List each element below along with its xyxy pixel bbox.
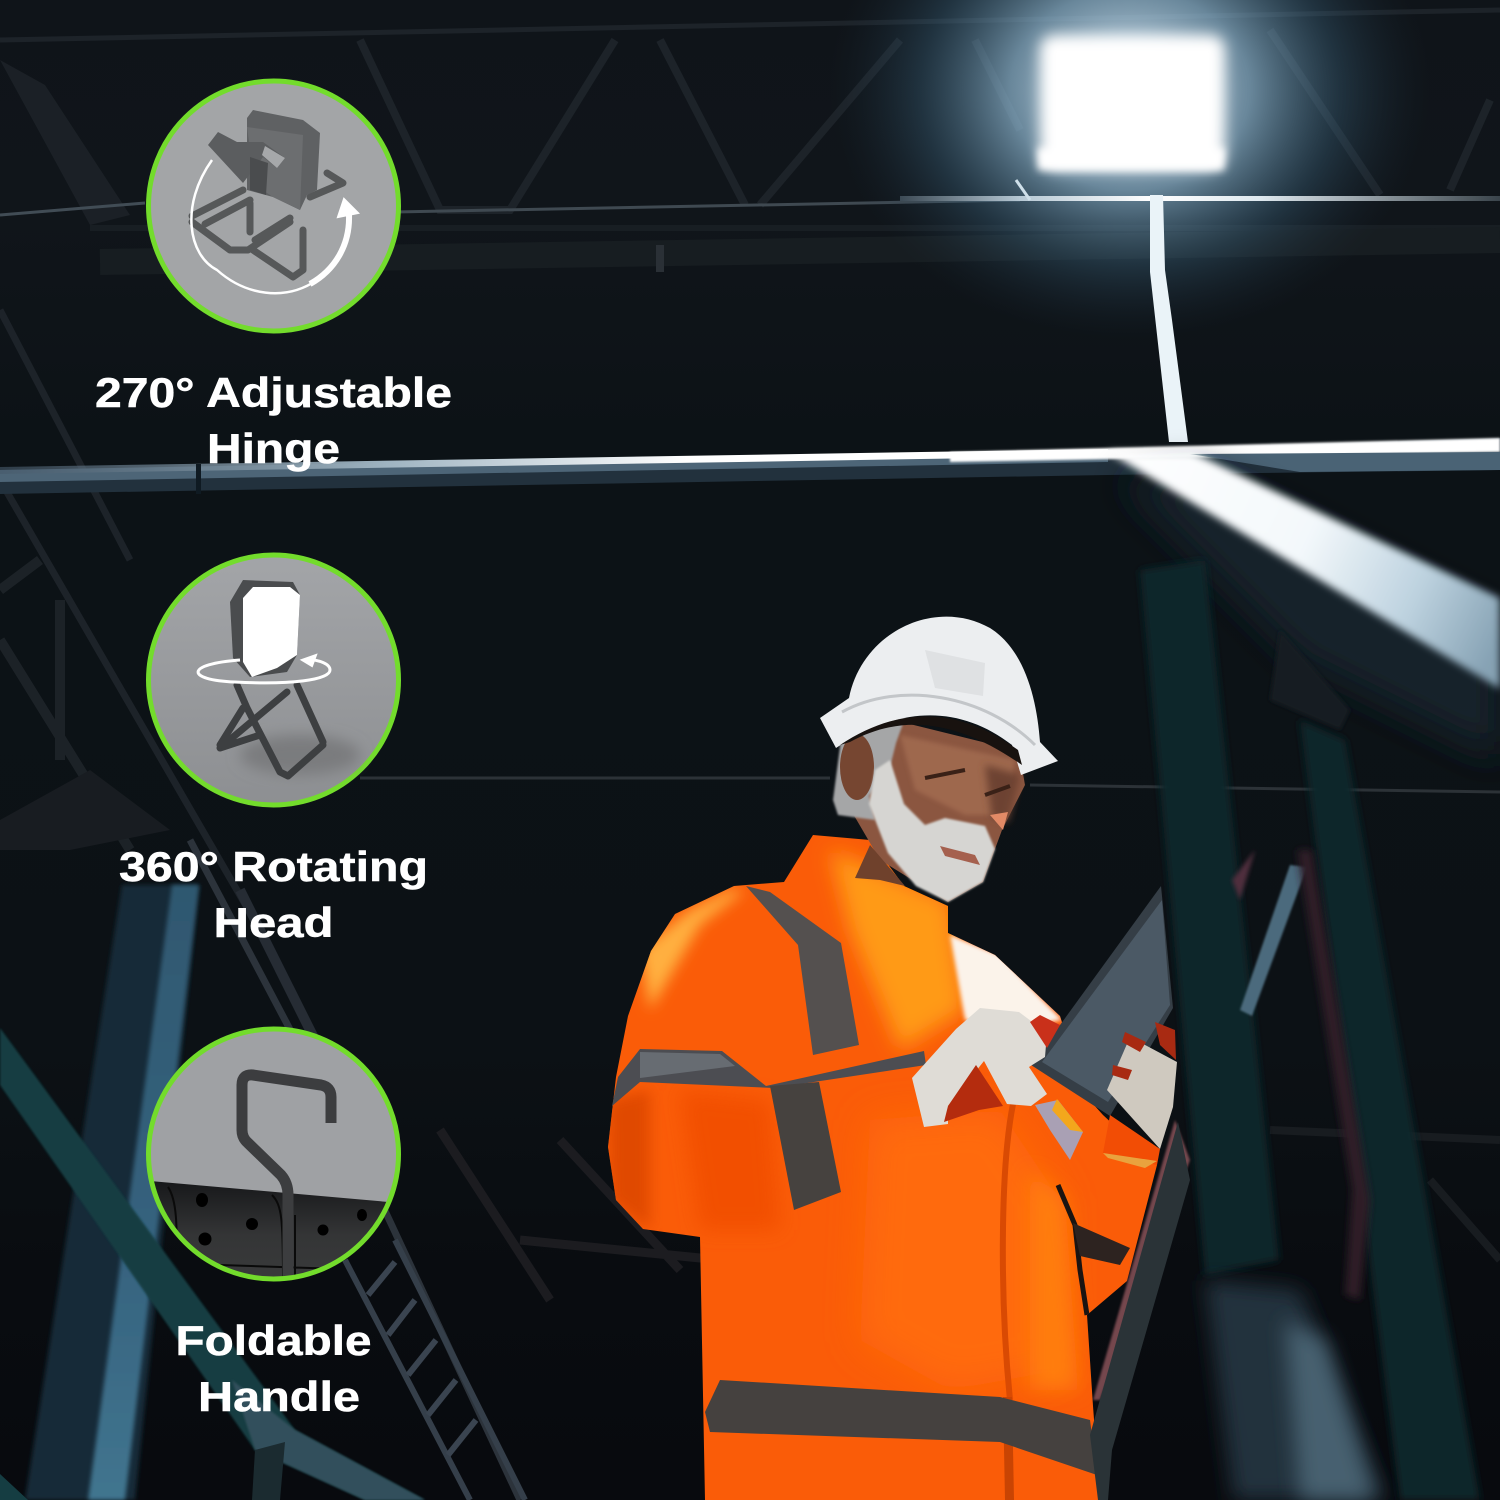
arrow: rotation xyxy=(191,160,317,293)
label: 360 rotating head: 360° Rotating xyxy=(119,843,428,890)
patch under tablet xyxy=(1035,1100,1083,1160)
left truss structure xyxy=(0,310,525,1500)
neck and face xyxy=(845,710,1025,902)
label: 270 adjustable hinge xyxy=(95,369,452,472)
label: 360 rotating head: Head xyxy=(214,899,334,946)
floodlight glow xyxy=(830,0,1500,340)
label: foldable handle: Foldable xyxy=(176,1317,372,1364)
icon: rotating head circle xyxy=(148,555,398,805)
label: 360 rotating head xyxy=(119,843,428,946)
bright diagonal beam xyxy=(1108,452,1500,760)
ear xyxy=(840,734,874,800)
horizontal pipe xyxy=(0,438,1500,494)
label: foldable handle xyxy=(176,1317,372,1420)
label: 270 adjustable hinge: Hinge xyxy=(207,425,340,472)
jacket xyxy=(608,835,1157,1500)
label: foldable handle: Handle xyxy=(198,1373,360,1420)
jacket lighting xyxy=(608,850,1087,1500)
blue column foreground xyxy=(0,885,425,1500)
feature: foldable handle xyxy=(148,1029,400,1420)
worker xyxy=(608,617,1177,1500)
hanging strap xyxy=(1150,195,1188,442)
icon: handle circle xyxy=(148,1029,400,1290)
foreground blurred railing xyxy=(1090,560,1480,1500)
hard hat xyxy=(820,617,1058,775)
hair xyxy=(833,710,908,820)
feature: 270 adjustable hinge xyxy=(95,81,452,472)
right glove xyxy=(1107,1037,1177,1149)
reflective stripes xyxy=(746,886,859,1055)
feature: 360 rotating head xyxy=(119,555,428,946)
icon: hinge circle xyxy=(148,81,398,331)
left glove xyxy=(912,1008,1047,1127)
arrow: horizontal rotation xyxy=(198,659,330,683)
label: 270 adjustable hinge: 270° Adjustable xyxy=(95,369,452,416)
beard xyxy=(869,760,995,902)
tablet xyxy=(1031,886,1173,1116)
